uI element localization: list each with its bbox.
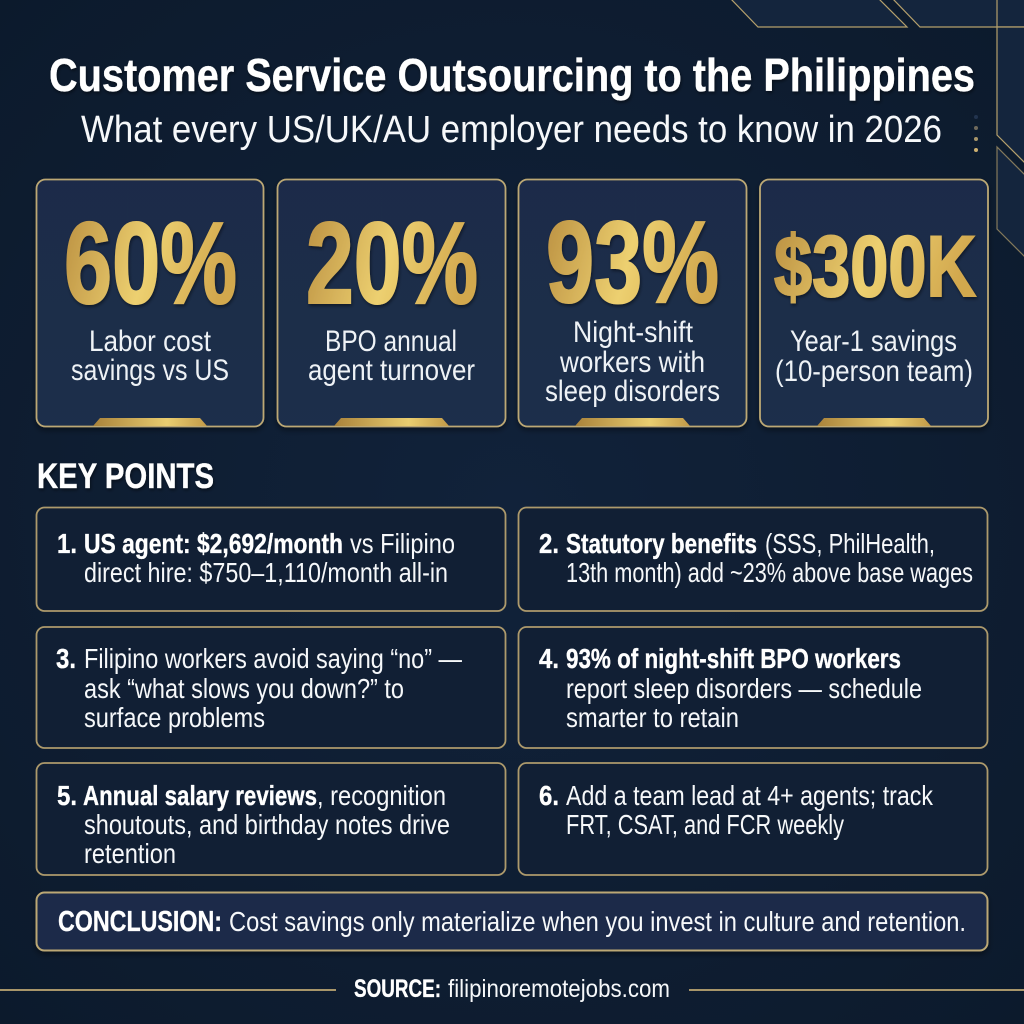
decorative corner circuit lines xyxy=(730,0,1024,258)
stat label: Year-1 savings xyxy=(790,325,957,358)
stat number: $300K xyxy=(774,219,976,315)
panel: key point 1 xyxy=(36,508,506,611)
key point 3 text xyxy=(56,643,462,733)
key point 2 text xyxy=(539,528,973,588)
stat label: savings vs US xyxy=(71,354,229,387)
stat card: $300K xyxy=(760,180,988,426)
card accent tab xyxy=(93,418,207,426)
card accent tab xyxy=(334,418,449,426)
key point 3 text: 3. xyxy=(56,643,76,674)
stat label: agent turnover xyxy=(308,354,475,387)
key point 2 text: Statutory benefits xyxy=(566,528,757,559)
stat label: Labor cost xyxy=(89,325,211,358)
panel: conclusion xyxy=(36,892,988,950)
key point 5 text: retention xyxy=(84,838,176,869)
panel: key point 3 xyxy=(36,627,506,748)
key point 1 text: 1. xyxy=(57,528,77,559)
stat label xyxy=(308,325,475,387)
key point 5 text: Annual salary reviews xyxy=(83,780,317,811)
stat label: (10-person team) xyxy=(775,355,973,388)
key point 1 text: direct hire: $750–1,110/month all-in xyxy=(84,557,448,588)
key point 3 text: ask “what slows you down?” to xyxy=(84,673,404,704)
card accent tab xyxy=(575,418,690,426)
key point 3 text: surface problems xyxy=(84,702,265,733)
decorative dots xyxy=(974,115,978,152)
stat card: 20% xyxy=(278,180,506,426)
key point 4 text: 4. xyxy=(539,643,559,674)
stat label xyxy=(71,325,229,387)
source divider right xyxy=(689,989,1024,991)
card accent tab xyxy=(817,418,931,426)
stat number: 93% xyxy=(546,197,719,327)
heading: key points: KEY POINTS xyxy=(37,457,214,496)
stat card: 60% xyxy=(36,180,264,426)
key point 6 text: FRT, CSAT, and FCR weekly xyxy=(566,809,844,840)
key point 5 text xyxy=(57,780,450,869)
key point 2 text: 2. xyxy=(539,528,559,559)
panel: key point 6 xyxy=(518,763,988,875)
key point 6 text xyxy=(539,780,934,840)
subtitle: What every US/UK/AU employer needs to know in 2026 xyxy=(81,109,942,151)
stat number: 60% xyxy=(64,198,237,328)
stat label xyxy=(775,325,973,388)
stat label: BPO annual xyxy=(325,325,457,358)
key point 4 text: report sleep disorders — schedule xyxy=(566,673,922,704)
source line xyxy=(354,975,670,1003)
key point 3 text: Filipino workers avoid saying “no” — xyxy=(84,643,462,674)
key point 1 text: vs Filipino xyxy=(350,528,455,559)
key point 5 text: shoutouts, and birthday notes drive xyxy=(84,809,450,840)
panel: key point 4 xyxy=(518,627,988,748)
source line: SOURCE: xyxy=(354,975,441,1003)
key point 2 text: (SSS, PhilHealth, xyxy=(765,528,935,559)
stat label: sleep disorders xyxy=(545,375,720,408)
key point 1 text: US agent: $2,692/month xyxy=(84,528,343,559)
key point 5 text: , recognition xyxy=(317,780,446,811)
key point 1 text xyxy=(57,528,455,588)
panel: key point 2 xyxy=(518,508,988,611)
key point 6 text: Add a team lead at 4+ agents; track xyxy=(566,780,934,811)
panel: key point 5 xyxy=(36,763,506,875)
source divider left xyxy=(0,989,336,991)
stat card: 93% xyxy=(518,180,746,426)
stat number: 20% xyxy=(306,198,478,328)
key point 5 text: 5. xyxy=(57,780,77,811)
stat label: workers with xyxy=(559,346,705,379)
key point 4 text xyxy=(539,643,922,733)
key point 4 text: 93% of night-shift BPO workers xyxy=(566,643,901,674)
stat label: Night-shift xyxy=(573,316,693,349)
key point 4 text: smarter to retain xyxy=(566,702,739,733)
conclusion text: CONCLUSION: xyxy=(58,906,222,938)
source line: filipinoremotejobs.com xyxy=(448,975,670,1003)
stat label xyxy=(545,316,720,408)
key point 6 text: 6. xyxy=(539,780,559,811)
